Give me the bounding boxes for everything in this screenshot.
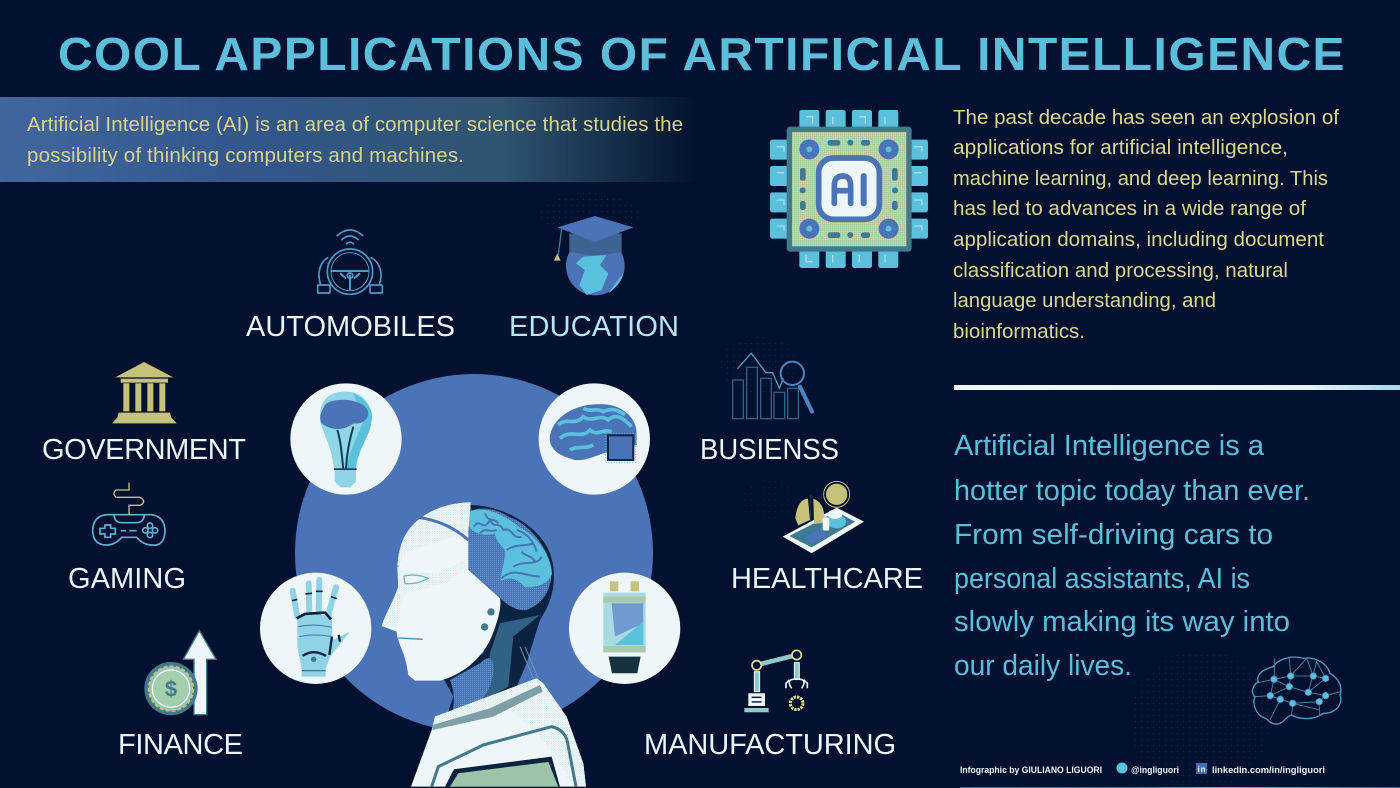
text block: decade paragraph: machine learning, and deep learning. This [953,167,1328,190]
icon: government building [112,362,177,423]
footer credits: @ingliguori [1131,765,1179,776]
icon circle: light bulb [290,383,402,495]
icon: robot arm [744,650,807,712]
label: business: BUSIENSS [700,434,839,466]
icon: steering wheel [318,230,382,294]
footer credits: linkedin.com/in/ingliguori [1212,765,1325,776]
icon: finance coin and arrow [144,631,216,715]
title: COOL APPLICATIONS OF ARTIFICIAL INTELLIGENCE [58,29,1344,80]
intro banner: Artificial Intelligence (AI) is an area of computer science that studies the [27,113,683,136]
label: finance: FINANCE [118,729,243,761]
text block: decade paragraph [953,106,1339,343]
label: government: GOVERNMENT [42,434,246,466]
text block: decade paragraph: bioinformatics. [953,320,1085,343]
footer credits: Infographic by GIULIANO LIGUORI [960,765,1102,776]
blue disc [295,374,653,732]
central illustration: robot [295,374,653,787]
intro banner: possibility of thinking computers and machines. [27,144,464,167]
text block: decade paragraph: language understanding, and [953,289,1216,312]
text block: decade paragraph: The past decade has seen an explosion of [953,106,1339,129]
robot figure [382,502,586,787]
footer credits: in [1198,765,1206,774]
icon circle: chip container [569,573,680,684]
icon circle: brain chip [539,383,650,495]
text block: hotter topic: slowly making its way into [954,606,1290,638]
footer credits [960,762,1325,776]
icon: healthcare phone [783,481,864,553]
icon: network brain [1252,657,1341,724]
label: automobiles: AUTOMOBILES [246,311,455,343]
icon: graduation globe [554,216,633,295]
text block: hotter topic: personal assistants, AI is [954,563,1250,595]
icon circle: robot hand [260,573,371,684]
icon: game controller [93,483,165,545]
text block: decade paragraph: application domains, including document [953,228,1324,251]
text block: hotter topic: hotter topic today than ever. [954,475,1310,507]
text block: decade paragraph: has led to advances in a wide range of [953,197,1306,220]
text block: hotter topic: From self-driving cars to [954,519,1273,551]
text block: decade paragraph: classification and processing, natural [953,259,1288,282]
icon: finance coin and arrow: $ [165,677,177,702]
label: education: EDUCATION [509,311,679,343]
suit [411,678,586,787]
text block: hotter topic: our daily lives. [954,650,1132,682]
face [382,502,500,681]
icon: AI chip [770,110,928,268]
intro banner [0,97,700,182]
icon: business chart [733,353,812,419]
text block: hotter topic: Artificial Intelligence is a [954,430,1265,462]
label: manufacturing: MANUFACTURING [644,729,896,761]
text block: decade paragraph: applications for artificial intelligence, [953,136,1288,159]
label: healthcare: HEALTHCARE [731,563,923,595]
label: gaming: GAMING [68,563,186,595]
text block: hotter topic [954,430,1310,682]
brain [468,508,552,610]
